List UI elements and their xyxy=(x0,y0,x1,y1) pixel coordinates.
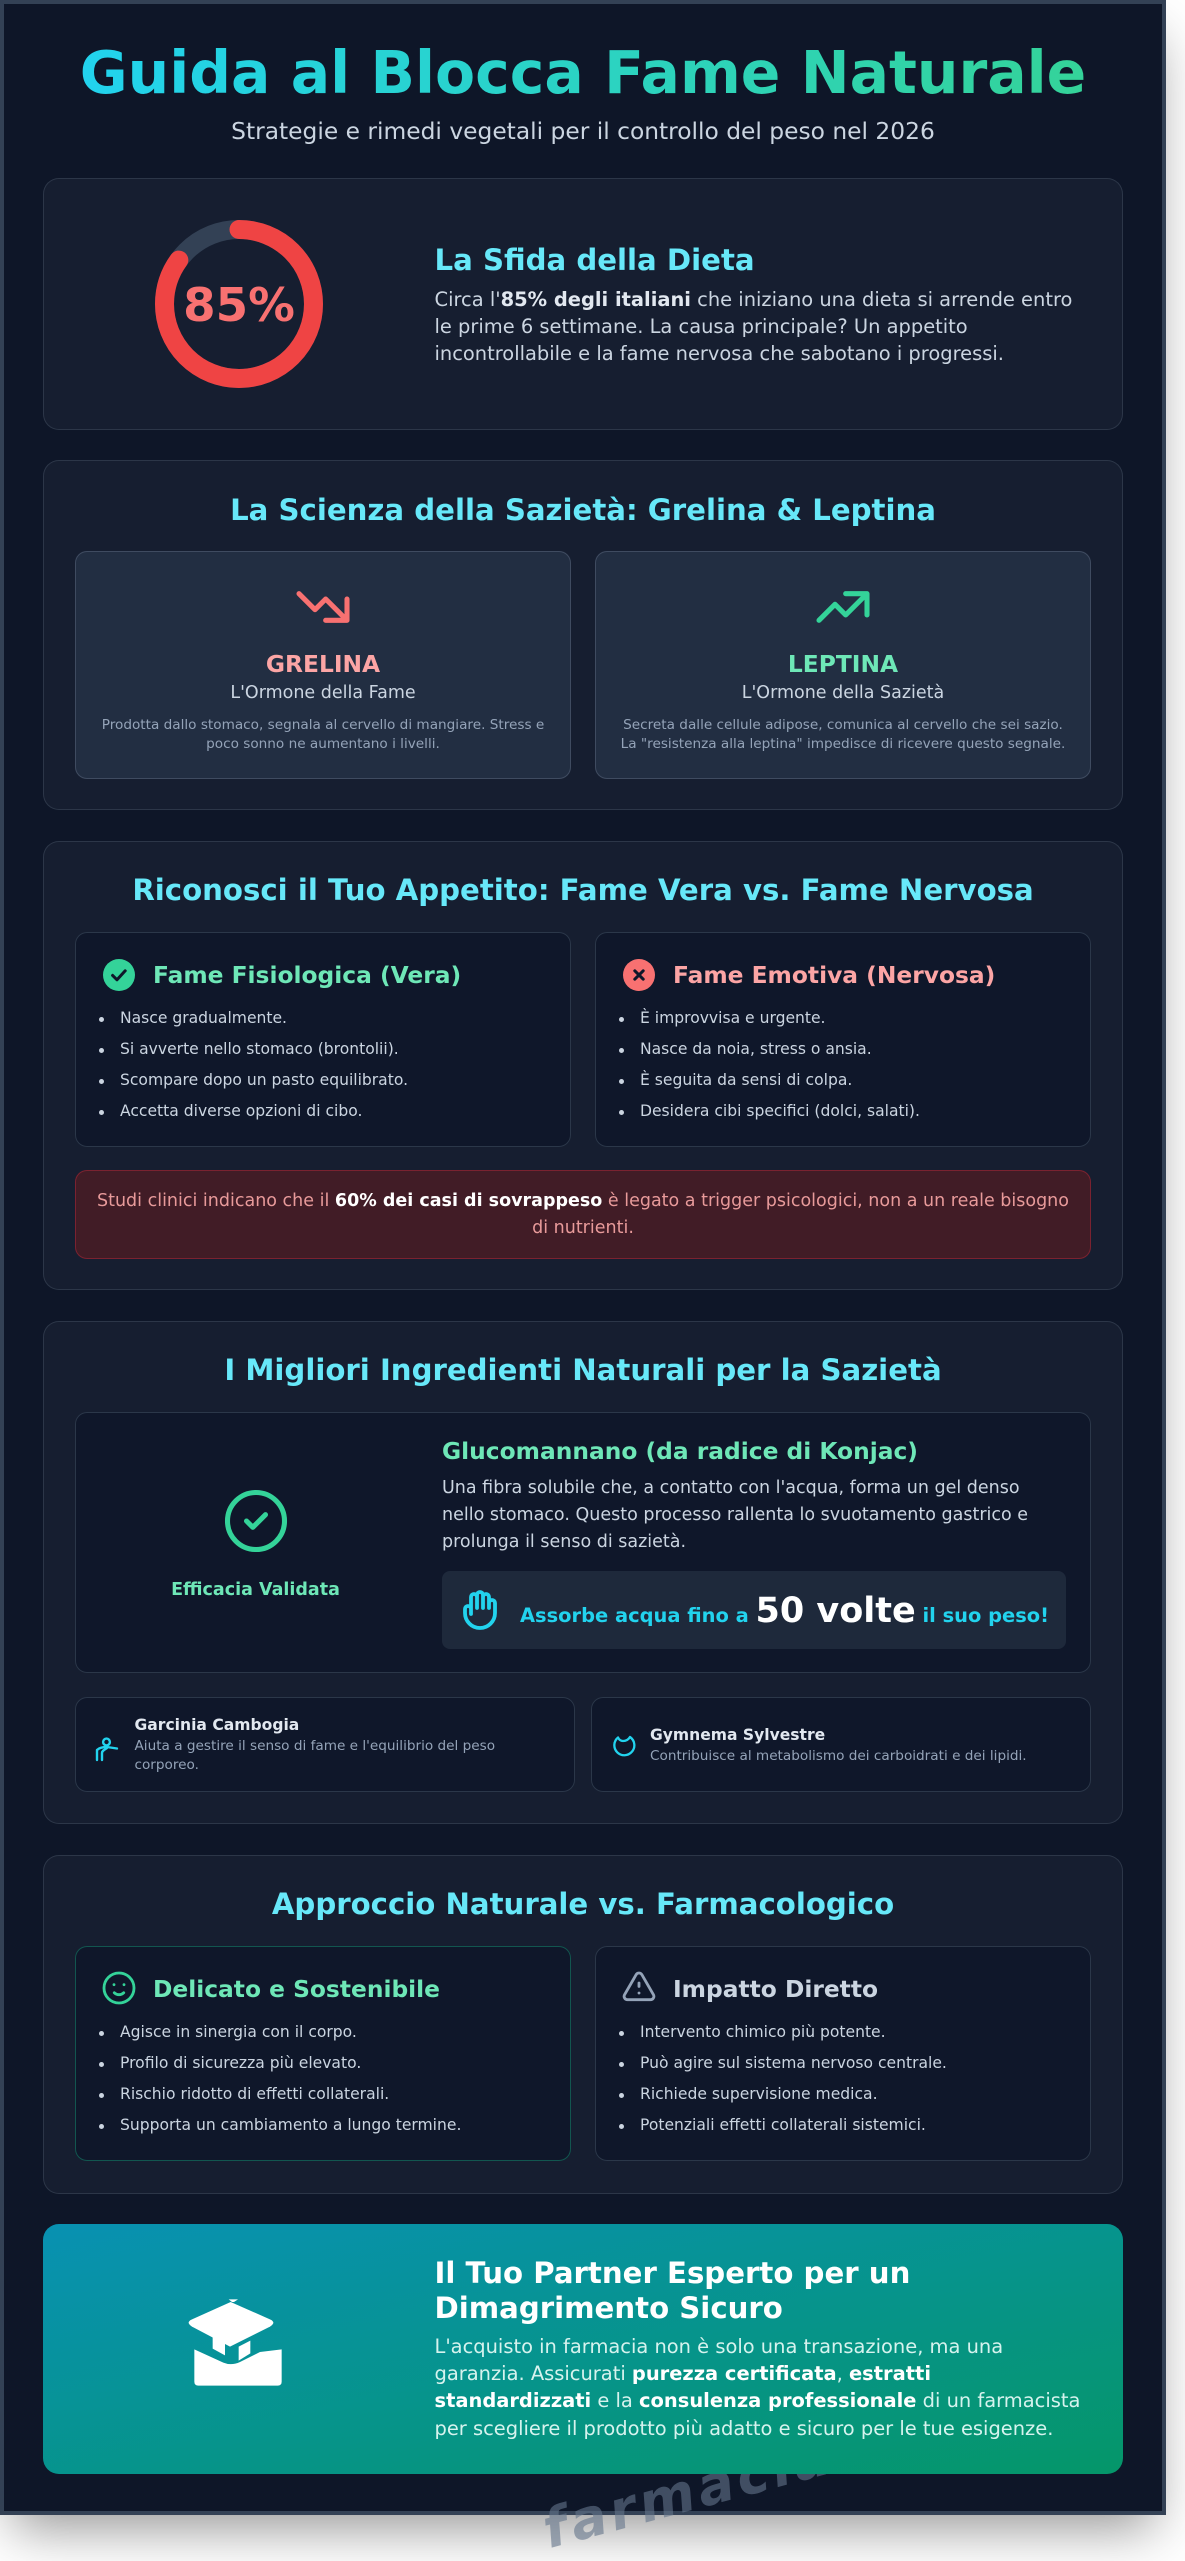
list: delicato xyxy=(99,2022,461,2134)
list: delicato: Supporta un cambiamento a lungo termine. xyxy=(120,2116,461,2134)
list: impatto diretto xyxy=(619,2022,947,2134)
list: impatto diretto: Intervento chimico più potente. xyxy=(640,2022,886,2040)
list: impatto diretto: Richiede supervisione medica. xyxy=(640,2084,878,2102)
heading: la sfida della dieta: La Sfida della Dieta xyxy=(434,243,755,277)
card: delicato e sostenibile xyxy=(75,1946,571,2161)
callout text: di nutrienti. xyxy=(532,1218,634,1238)
callout text xyxy=(97,1191,1069,1238)
list: fame emotiva: È improvvisa e urgente. xyxy=(640,1009,826,1027)
stat text: Assorbe acqua fino a 50 volte il suo peso! xyxy=(520,1591,1049,1631)
text: garcinia title: Garcinia Cambogia xyxy=(134,1716,299,1734)
panel: riconosci il tuo appetito xyxy=(43,841,1123,1290)
text: leptina: La "resistenza alla leptina" impedisce di ricevere questo segnale. xyxy=(621,736,1065,752)
heading: partner esperto: Il Tuo Partner Esperto per un xyxy=(434,2256,910,2290)
card: fame emotiva xyxy=(595,932,1091,1147)
text: partner esperto: per scegliere il prodotto più adatto e sicuro per le tue esigenze. xyxy=(434,2417,1053,2440)
card: fame fisiologica xyxy=(75,932,571,1147)
list: fame fisiologica xyxy=(99,1009,408,1120)
panel: migliori ingredienti xyxy=(43,1321,1123,1824)
subtitle: ormone della fame: L'Ormone della Fame xyxy=(230,683,416,703)
heading: ingredienti: I Migliori Ingredienti Naturali per la Sazietà xyxy=(224,1353,942,1387)
heading: impatto diretto: Impatto Diretto xyxy=(673,1975,878,2003)
list: impatto diretto: Può agire sul sistema nervoso centrale. xyxy=(640,2054,947,2072)
list: fame emotiva: Nasce da noia, stress o ansia. xyxy=(640,1040,872,1058)
name: grelina: GRELINA xyxy=(266,650,380,678)
text: la sfida xyxy=(434,288,1072,365)
text: partner esperto: standardizzati e la consulenza professionale di un farmacista xyxy=(434,2389,1080,2412)
list: delicato: Rischio ridotto di effetti collaterali. xyxy=(120,2084,389,2102)
text: glucomannano: Una fibra solubile che, a contatto con l'acqua, forma un gel denso xyxy=(442,1478,1020,1498)
card: impatto diretto xyxy=(595,1946,1091,2161)
heading: delicato: Delicato e Sostenibile xyxy=(153,1975,440,2003)
text: gymnema title: Gymnema Sylvestre xyxy=(650,1726,825,1744)
panel: la sfida della dieta xyxy=(43,178,1123,430)
text: glucomannano: prolunga il senso di sazietà. xyxy=(442,1532,686,1552)
icon: graduation cap and book xyxy=(188,2299,282,2386)
icon: gymnema xyxy=(613,1736,636,1756)
icon: trending down xyxy=(296,591,350,623)
icon: garcinia xyxy=(96,1737,118,1762)
heading: fame emotiva: Fame Emotiva (Nervosa) xyxy=(673,961,995,989)
text: garcinia description xyxy=(134,1738,495,1773)
icon: smile xyxy=(102,1972,136,2004)
text: grelina: poco sonno ne aumentano i livelli. xyxy=(206,736,440,752)
card: gymnema sylvestre xyxy=(591,1697,1091,1792)
text: partner esperto xyxy=(434,2335,1080,2440)
icon: check badge xyxy=(103,959,135,991)
list: delicato: Profilo di sicurezza più elevato. xyxy=(120,2054,361,2072)
text: la sfida: incontrollabile e la fame nervosa che sabotano i progressi. xyxy=(434,342,1004,365)
list: fame fisiologica: Nasce gradualmente. xyxy=(120,1009,287,1027)
stat box: 50 volte xyxy=(442,1571,1066,1649)
card: grelina xyxy=(75,551,571,779)
text: gymnema description: Contribuisce al metabolismo dei carboidrati e dei lipidi. xyxy=(650,1748,1027,1764)
text: garcinia description: Aiuta a gestire il senso di fame e l'equilibrio del peso xyxy=(134,1738,495,1754)
text: garcinia description: corporeo. xyxy=(134,1757,199,1773)
list: delicato: Agisce in sinergia con il corpo. xyxy=(120,2022,357,2040)
list: fame fisiologica: Accetta diverse opzioni di cibo. xyxy=(120,1102,362,1120)
list: fame emotiva: È seguita da sensi di colpa. xyxy=(640,1071,852,1089)
icon: trending up xyxy=(816,591,870,623)
text: leptina: Secreta dalle cellule adipose, comunica al cervello che sei sazio. xyxy=(623,717,1063,733)
heading: glucomannano: Glucomannano (da radice di Konjac) xyxy=(442,1437,918,1465)
label: efficacia validata: Efficacia Validata xyxy=(171,1580,340,1600)
text: la sfida: Circa l'85% degli italiani che iniziano una dieta si arrende entro xyxy=(434,288,1072,311)
text: leptina xyxy=(621,717,1065,752)
heading: partner esperto xyxy=(434,2256,910,2325)
icon: validated check xyxy=(224,1490,288,1552)
heading: partner esperto: Dimagrimento Sicuro xyxy=(434,2291,783,2325)
panel: partner esperto xyxy=(43,2224,1123,2474)
heading: approccio: Approccio Naturale vs. Farmacologico xyxy=(272,1887,894,1921)
list: fame emotiva: Desidera cibi specifici (dolci, salati). xyxy=(640,1102,920,1120)
chart: 85% ring: 85% xyxy=(183,279,295,333)
callout text: Studi clinici indicano che il 60% dei casi di sovrappeso è legato a trigger psicologici, non a un reale bisogno xyxy=(97,1191,1069,1211)
title: Guida al Blocca Fame Naturale xyxy=(80,39,1086,107)
callout: 60% sovrappeso xyxy=(75,1170,1091,1259)
subtitle: ormone della sazietà: L'Ormone della Sazietà xyxy=(742,683,944,703)
subtitle: Strategie e rimedi vegetali per il controllo del peso nel 2026 xyxy=(231,117,935,145)
chart: 85% ring xyxy=(155,220,323,388)
card: leptina xyxy=(595,551,1091,779)
list: impatto diretto: Potenziali effetti collaterali sistemici. xyxy=(640,2116,926,2134)
card: garcinia cambogia xyxy=(75,1697,575,1792)
icon: cross badge xyxy=(623,959,655,991)
text: partner esperto: garanzia. Assicurati purezza certificata, estratti xyxy=(434,2362,931,2385)
text: glucomannano: nello stomaco. Questo processo rallenta lo svuotamento gastrico e xyxy=(442,1505,1028,1525)
icon: warning xyxy=(622,1972,656,2002)
panel: naturale vs farmacologico xyxy=(43,1855,1123,2194)
watermark: farmacias xyxy=(536,2414,875,2561)
card: glucomannano xyxy=(75,1412,1091,1673)
list: fame fisiologica: Scompare dopo un pasto equilibrato. xyxy=(120,1071,408,1089)
heading: riconosci: Riconosci il Tuo Appetito: Fame Vera vs. Fame Nervosa xyxy=(132,873,1034,907)
heading: fame fisiologica: Fame Fisiologica (Vera) xyxy=(153,961,461,989)
text: la sfida: le prime 6 settimane. La causa principale? Un appetito xyxy=(434,315,968,338)
icon: hand xyxy=(463,1590,497,1630)
list: fame fisiologica: Si avverte nello stomaco (brontolii). xyxy=(120,1040,399,1058)
text: glucomannano xyxy=(442,1478,1028,1552)
text: grelina: Prodotta dallo stomaco, segnala al cervello di mangiare. Stress e xyxy=(102,717,544,733)
list: fame emotiva xyxy=(619,1008,920,1120)
text: partner esperto: L'acquisto in farmacia non è solo una transazione, ma una xyxy=(434,2335,1003,2358)
name: leptina: LEPTINA xyxy=(788,650,898,678)
heading: la scienza: La Scienza della Sazietà: Grelina & Leptina xyxy=(230,493,936,527)
text: grelina xyxy=(102,717,544,752)
panel: la scienza della sazietà xyxy=(43,460,1123,810)
